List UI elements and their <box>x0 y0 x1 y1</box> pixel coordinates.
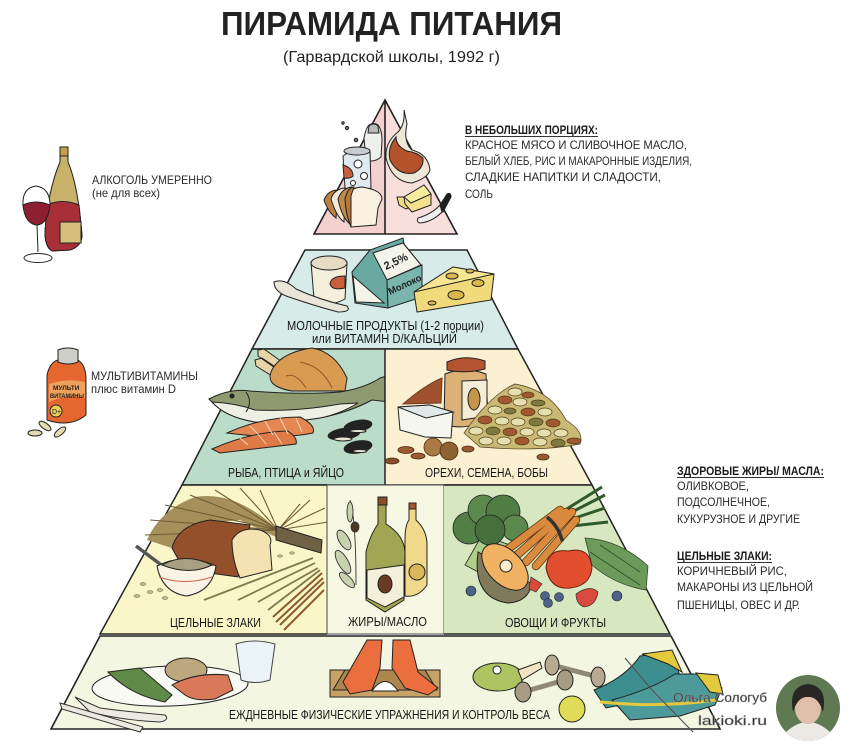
text: healthy fats: ПОДСОЛНЕЧНОЕ, <box>677 495 770 509</box>
panel: small portions text: БЕЛЫЙ ХЛЕБ, РИС И МАКАРОННЫЕ ИЗДЕЛИЯ, <box>465 153 692 168</box>
icon: whole grain pasta <box>204 558 324 630</box>
icon: steak <box>386 110 430 183</box>
icon: nut pile <box>464 384 581 449</box>
panel: small portions text: В НЕБОЛЬШИХ ПОРЦИЯХ: <box>465 123 598 137</box>
icon: ground spice pile <box>403 378 442 404</box>
icon: olive oil bottle <box>366 497 405 612</box>
icon: broccoli <box>453 495 528 573</box>
label: exercise: ЕЖДНЕВНЫЕ ФИЗИЧЕСКИЕ УПРАЖНЕНИЯ И КОНТРОЛЬ ВЕСА <box>229 708 551 722</box>
icon: vitamin bottle: МУЛЬТИ <box>53 385 80 392</box>
watermark: Ольга Сологуб <box>673 690 767 705</box>
text: healthy fats <box>677 464 824 526</box>
icon: water glass <box>236 641 275 682</box>
portrait <box>776 675 840 741</box>
icon: scattered grains <box>134 552 294 600</box>
label: dairy <box>287 319 484 346</box>
label: carton percent: 2,5% <box>382 251 410 273</box>
icon: milk carton <box>352 238 422 308</box>
panel: nuts tier right <box>385 349 592 485</box>
icon: vitamin bottle <box>28 348 86 439</box>
text: healthy fats: КУКУРУЗНОЕ И ДРУГИЕ <box>677 512 800 526</box>
icon: wheat sheaf <box>145 488 328 553</box>
label: dairy: МОЛОЧНЫЕ ПРОДУКТЫ (1-2 порции) <box>287 319 484 333</box>
label: oils: ЖИРЫ/МАСЛО <box>348 615 427 629</box>
icon: mussels <box>327 418 373 455</box>
icon: dumbbells <box>515 655 605 702</box>
text: whole grains: ПШЕНИЦЫ, ОВЕС И ДР. <box>677 598 800 612</box>
label: nuts: ОРЕХИ, СЕМЕНА, БОБЫ <box>425 466 548 480</box>
icon: berries <box>466 577 622 608</box>
icon: olive branch <box>332 500 359 590</box>
label: dairy: или ВИТАМИН D/КАЛЬЦИЙ <box>312 331 457 346</box>
panel: exercise base tier <box>51 636 723 732</box>
icon: walnuts and almonds <box>385 438 549 464</box>
icon: salt shaker <box>342 122 382 161</box>
subtitle: (Гарвардской школы, 1992 г) <box>283 49 500 66</box>
icon: bowl of grain <box>136 546 216 596</box>
icon: roast chicken <box>255 348 347 391</box>
text: whole grains: ЦЕЛЬНЫЕ ЗЛАКИ: <box>677 549 772 563</box>
icon: vitamin bottle: ВИТАМИНЫ <box>50 394 84 400</box>
panel: dairy tier <box>252 238 518 349</box>
text: alcohol: АЛКОГОЛЬ УМЕРЕННО <box>92 173 212 187</box>
icon: soda can <box>343 147 371 191</box>
title: ПИРАМИДА ПИТАНИЯ <box>221 5 562 42</box>
label: grains: ЦЕЛЬНЫЕ ЗЛАКИ <box>170 616 261 630</box>
icon: salmon fillets <box>212 417 313 453</box>
panel: small portions text: КРАСНОЕ МЯСО И СЛИВОЧНОЕ МАСЛО, <box>465 138 687 152</box>
label: protein: РЫБА, ПТИЦА и ЯЙЦО <box>228 465 344 480</box>
icon: vitamin bottle: D+ <box>52 409 61 416</box>
icon: yogurt cup <box>311 256 347 304</box>
panel: small portions text <box>465 123 692 201</box>
label: carton name: Молоко <box>387 273 424 298</box>
panel: oils tier <box>327 485 444 634</box>
icon: wine and bottle <box>23 147 82 262</box>
text: multivitamins: плюс витамин D <box>91 382 176 396</box>
panel: small portions text: СЛАДКИЕ НАПИТКИ И СЛАДОСТИ, <box>465 170 661 184</box>
icon: brown loaf <box>172 520 272 578</box>
panel: pyramid top, limited foods <box>314 100 457 234</box>
icon: butter and knife <box>397 185 451 223</box>
text: healthy fats: ОЛИВКОВОЕ, <box>677 479 749 493</box>
icon: leafy greens <box>585 538 648 590</box>
icon: cheese <box>414 267 494 312</box>
text: alcohol <box>92 173 212 200</box>
watermark <box>673 690 767 728</box>
icon: table tennis paddle <box>473 662 542 691</box>
icon: fork and knife <box>60 697 167 732</box>
label: vegetables: ОВОЩИ И ФРУКТЫ <box>505 616 606 630</box>
icon: dinner plate <box>91 658 249 709</box>
text: multivitamins <box>91 369 198 396</box>
icon: apple <box>546 550 592 588</box>
icon: tofu block <box>398 405 453 438</box>
icon: sunflower oil bottle <box>405 503 427 596</box>
icon: spoon <box>274 281 348 312</box>
text: whole grains: МАКАРОНЫ ИЗ ЦЕЛЬНОЙ <box>677 579 813 594</box>
panel: protein tier left <box>182 348 390 485</box>
icon: peanut butter jar <box>444 358 488 427</box>
icon: running shoes <box>594 650 723 732</box>
text: multivitamins: МУЛЬТИВИТАМИНЫ <box>91 369 198 383</box>
icon: melon <box>473 535 537 603</box>
panel: grains tier <box>100 485 328 634</box>
icon: tennis ball <box>559 696 585 722</box>
icon: carrots <box>508 510 576 566</box>
icon: carrot tops <box>565 487 608 526</box>
panel: small portions text: СОЛЬ <box>465 187 493 201</box>
icon: bread loaf <box>324 187 382 227</box>
watermark: lakioki.ru <box>698 713 767 728</box>
text: healthy fats: ЗДОРОВЫЕ ЖИРЫ/ МАСЛА: <box>677 464 824 478</box>
icon: feet on scale <box>330 640 440 697</box>
text: whole grains <box>677 549 813 612</box>
text: whole grains: КОРИЧНЕВЫЙ РИС, <box>677 563 787 578</box>
icon: fish <box>209 375 390 422</box>
panel: vegetables tier <box>444 485 670 634</box>
text: alcohol: (не для всех) <box>92 186 160 200</box>
